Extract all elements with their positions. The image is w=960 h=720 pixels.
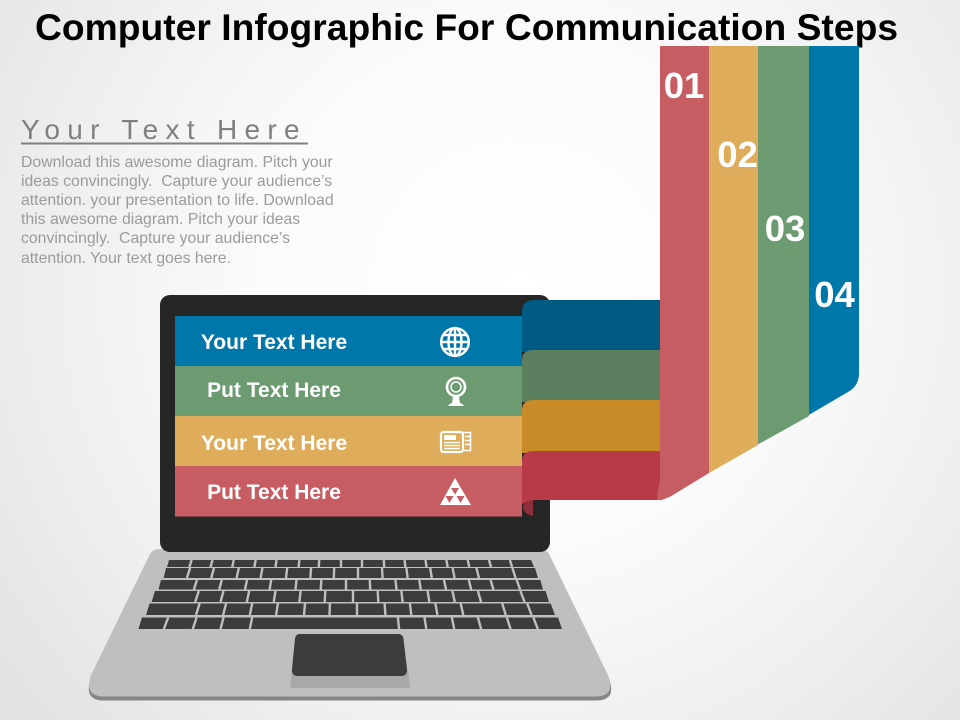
- description paragraph: Download this awesome diagram. Pitch your: [21, 154, 333, 171]
- text block: heading and description: [21, 114, 334, 267]
- band 4: red: Put Text Here: [207, 481, 341, 504]
- ribbon folded backs: [522, 300, 662, 516]
- back band: blue: [522, 300, 662, 352]
- back band: orange: [522, 400, 662, 453]
- ribbon 02: yellow: 02: [717, 134, 758, 175]
- icon: globe: [441, 328, 469, 356]
- base top surface: [89, 549, 610, 696]
- description paragraph: attention. your presentation to life. Download: [21, 192, 334, 209]
- band 1: blue: Your Text Here: [201, 331, 347, 354]
- screen bands: [175, 316, 522, 516]
- band 1: blue: [175, 316, 522, 366]
- title: Computer Infographic For Communication Steps: [35, 6, 898, 48]
- base edge shadow: [89, 556, 611, 700]
- band 4: red: [175, 466, 522, 516]
- ribbon curl: [523, 500, 533, 516]
- band 3: yellow: Your Text Here: [201, 432, 347, 455]
- ribbon 01: red: 01: [664, 65, 704, 106]
- description paragraph: convincingly. Capture your audience’s: [21, 230, 290, 247]
- touchpad shadow: [290, 670, 410, 688]
- touchpad: [292, 634, 407, 676]
- description paragraph: attention. Your text goes here.: [21, 250, 231, 267]
- back band: green: [522, 350, 662, 402]
- ribbon 02: yellow: [709, 46, 758, 473]
- band 3: yellow: [175, 416, 522, 466]
- heading: your text here: Your Text Here: [21, 114, 307, 145]
- band 2: green: Put Text Here: [207, 379, 341, 402]
- ribbon 03: green: 03: [765, 208, 805, 249]
- band 2: green: [175, 366, 522, 416]
- back band: red: [522, 451, 662, 504]
- description paragraph: [21, 154, 334, 267]
- laptop base: [89, 549, 611, 700]
- icon: triangle pyramid: [440, 478, 471, 505]
- icon: newspaper: [441, 432, 470, 452]
- keyboard: [138, 560, 562, 629]
- description paragraph: ideas convincingly. Capture your audience’s: [21, 173, 332, 190]
- icon: webcam: [447, 378, 465, 406]
- ribbon 04: blue: 04: [814, 274, 855, 315]
- vertical ribbons: [657, 46, 859, 500]
- ribbon 03: green: [757, 46, 809, 445]
- ribbon 01: red: [657, 46, 709, 500]
- description paragraph: this awesome diagram. Pitch your ideas: [21, 211, 300, 228]
- ribbon 04: blue: [807, 46, 859, 416]
- laptop screen bezel: [160, 295, 550, 552]
